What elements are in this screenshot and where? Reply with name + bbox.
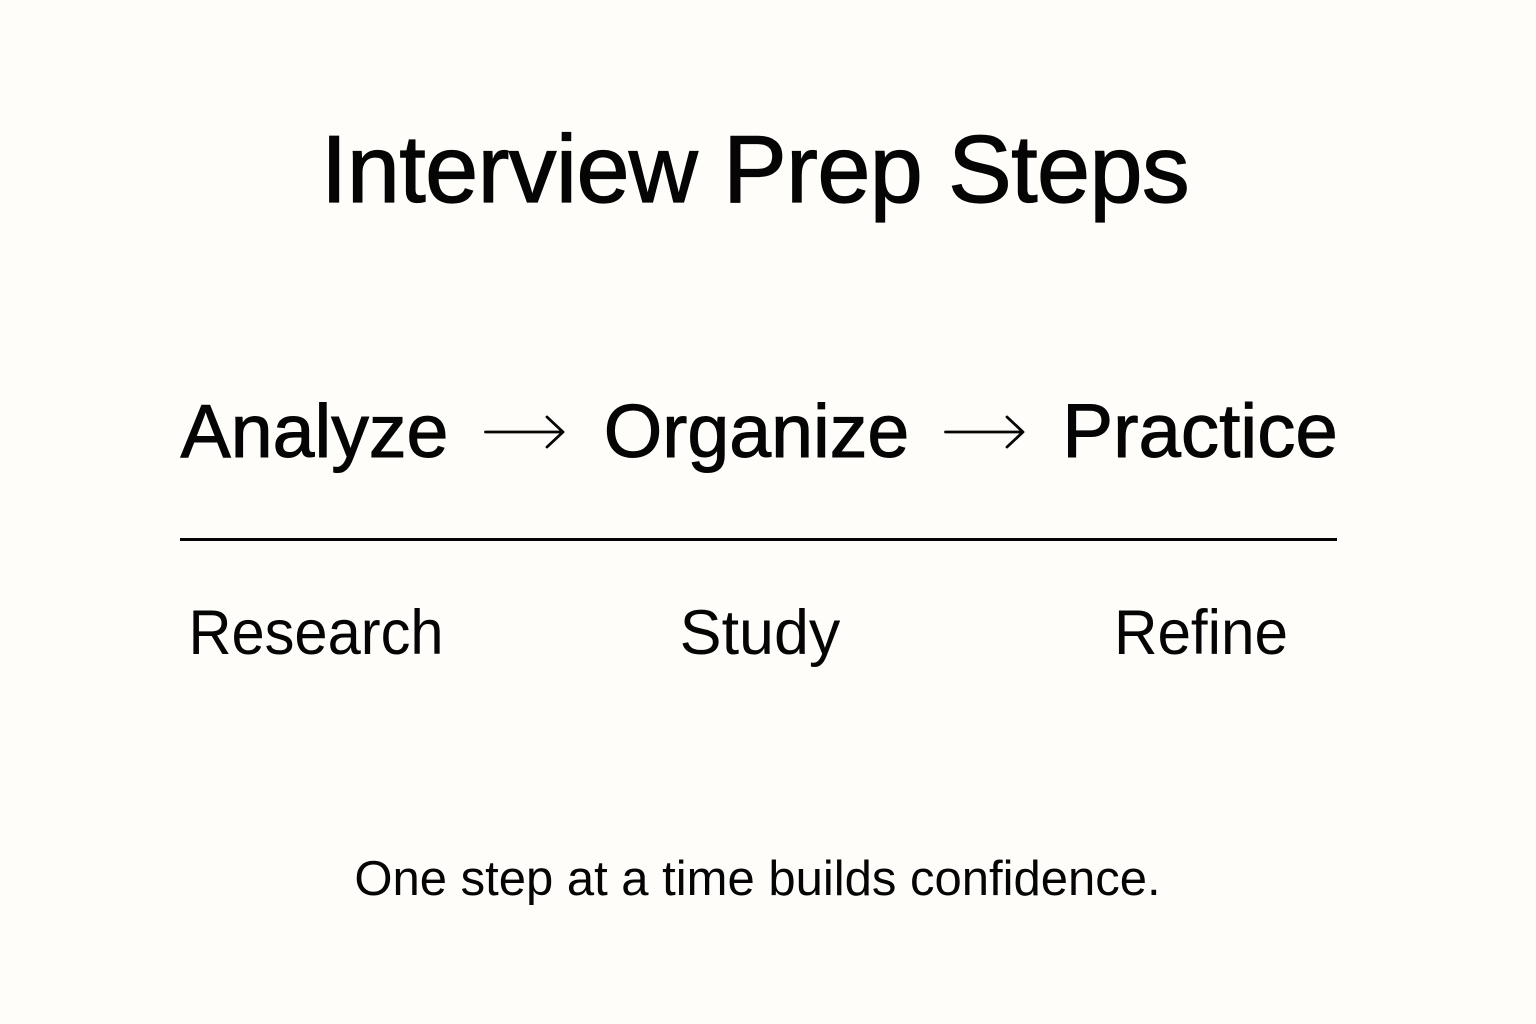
arrow: Organize to Practice <box>944 416 1024 448</box>
label: Study: Study <box>680 598 840 668</box>
label: Research: Research <box>188 598 444 668</box>
step: Organize: Organize <box>604 389 909 473</box>
divider line <box>180 538 1337 541</box>
tagline: One step at a time builds confidence. <box>354 852 1161 906</box>
step: Practice: Practice <box>1062 389 1338 474</box>
arrow: Analyze to Organize <box>484 416 564 448</box>
step: Analyze: Analyze <box>181 389 448 473</box>
label: Refine: Refine <box>1113 598 1288 668</box>
title: Interview Prep Steps <box>321 117 1189 223</box>
